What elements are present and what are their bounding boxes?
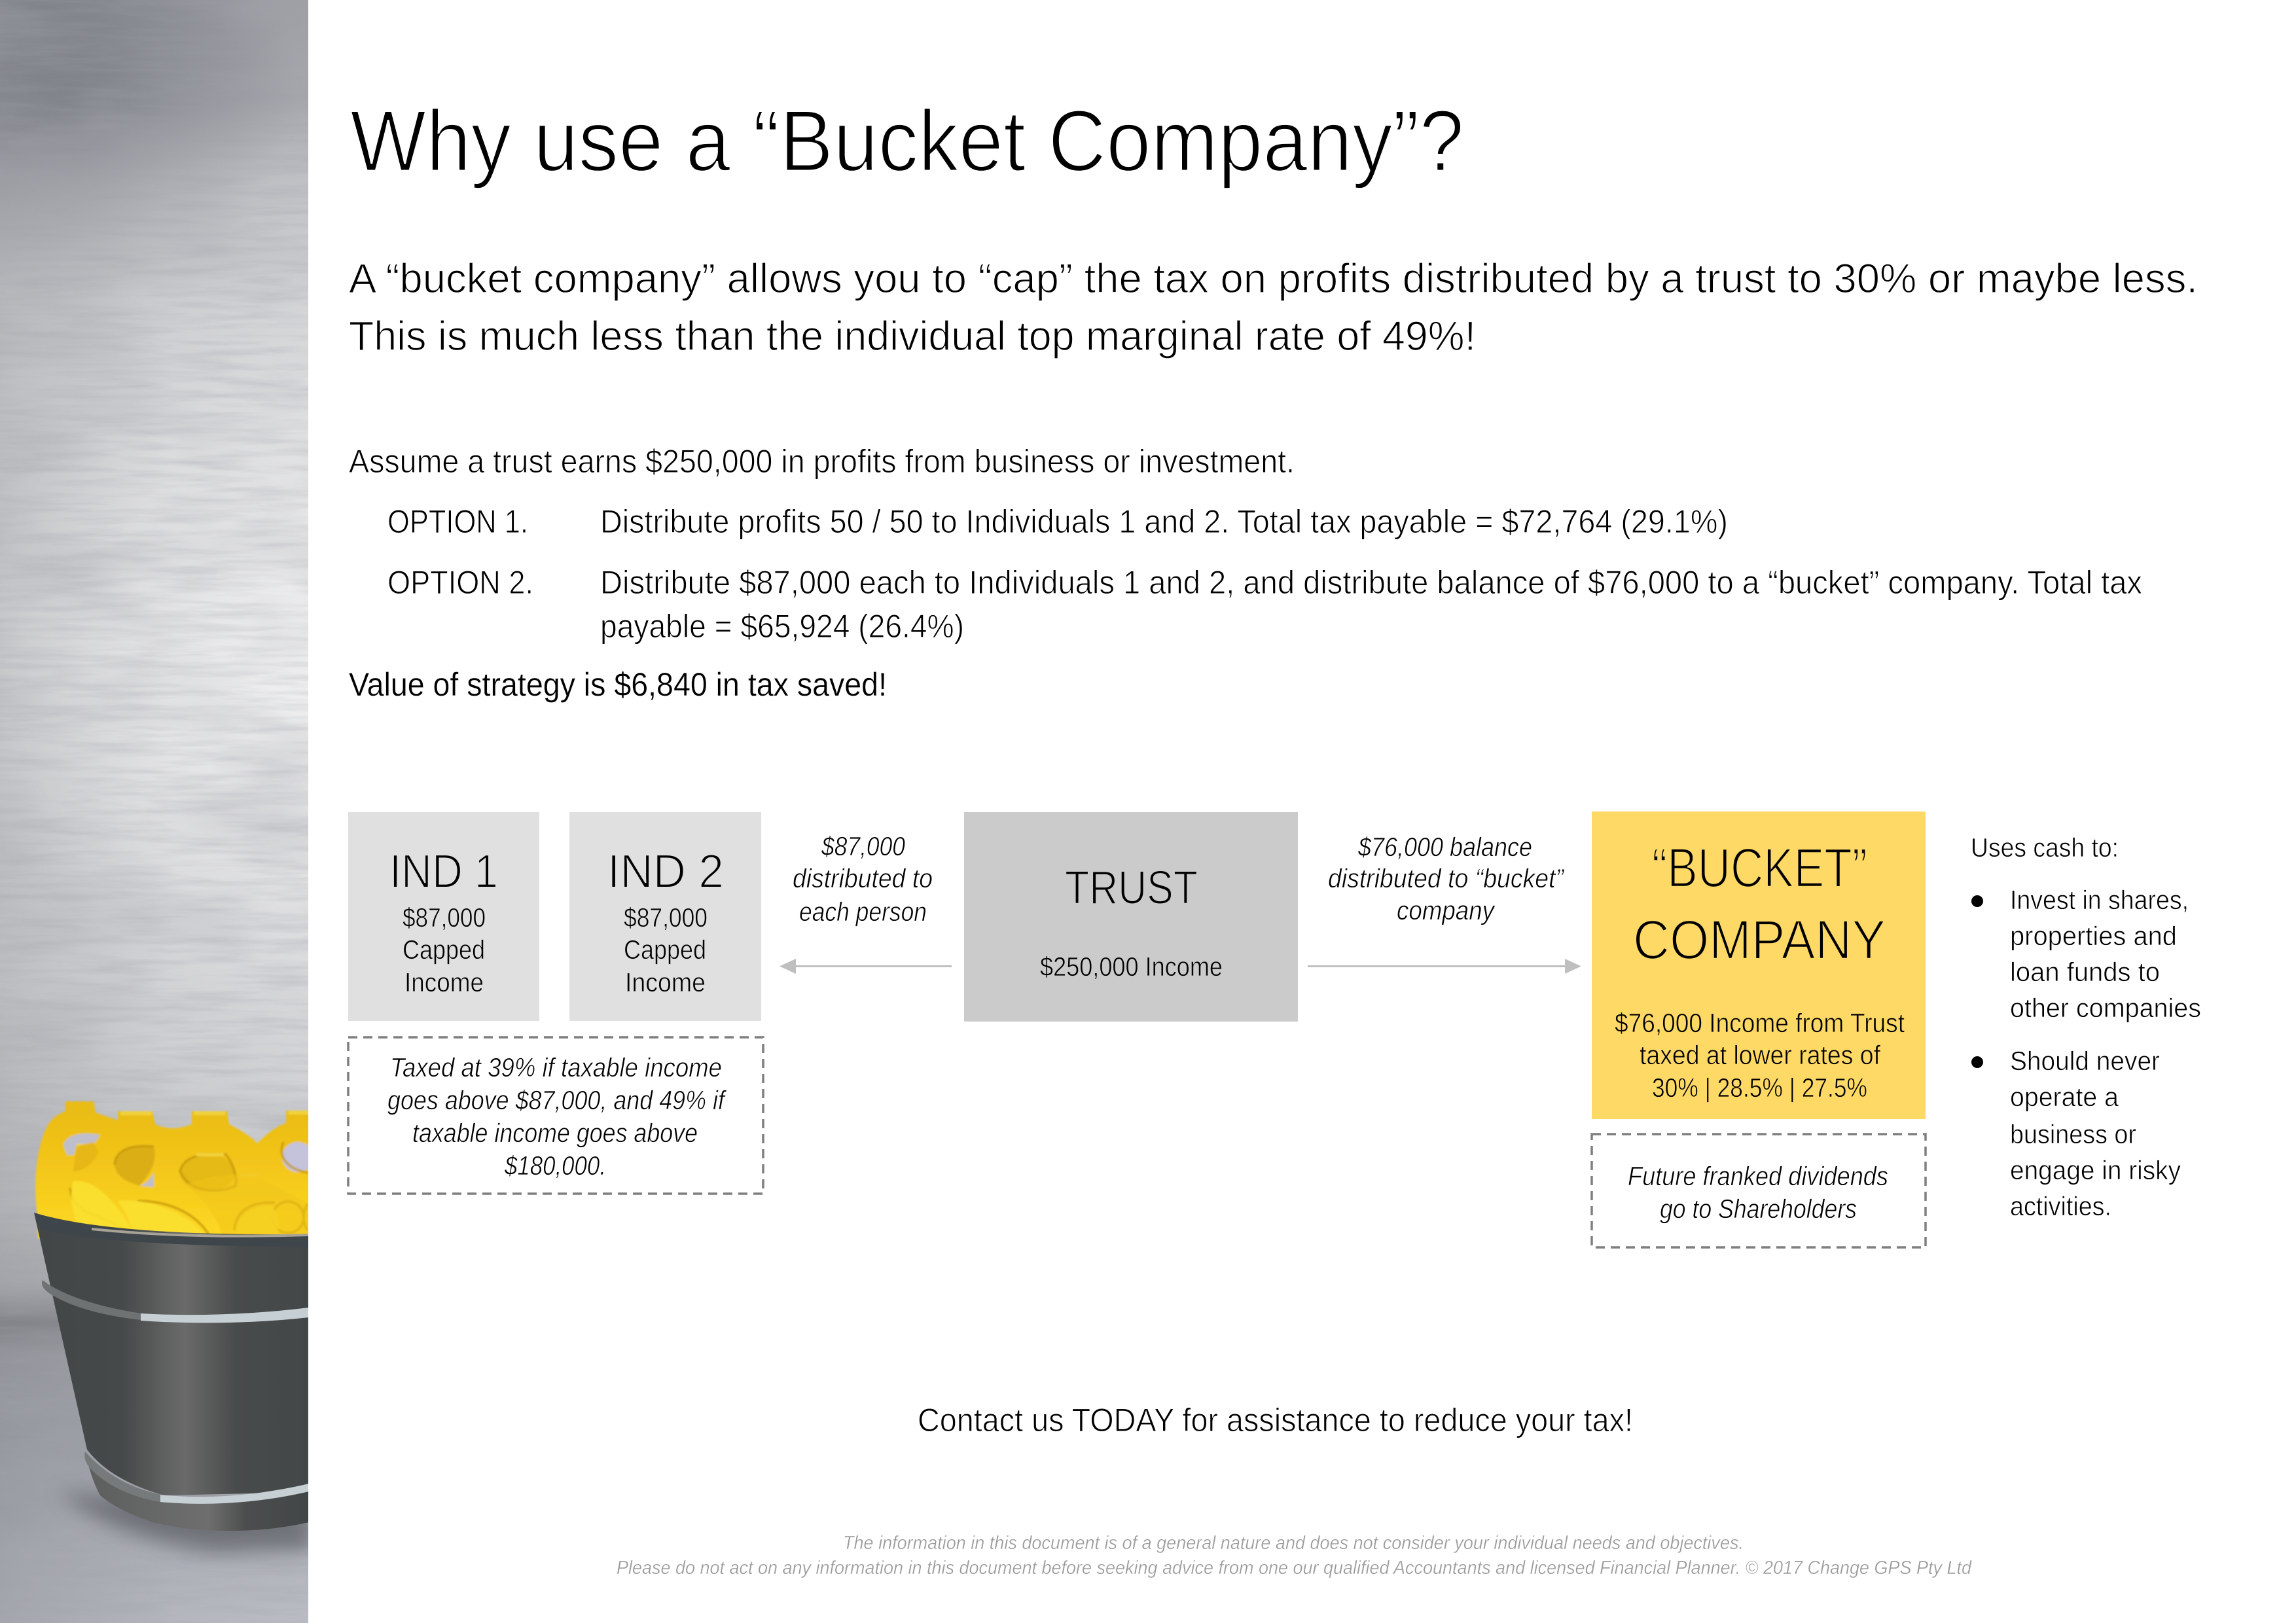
text block: uses of cash: activities. bbox=[2010, 1191, 2111, 1221]
text block: uses of cash bbox=[1971, 832, 2201, 1221]
text block: uses of cash: loan funds to bbox=[2010, 957, 2160, 987]
box: individual 2: Income bbox=[625, 967, 706, 997]
icon: gold dollar coins bbox=[35, 1101, 314, 1238]
footer disclaimer: Please do not act on any information in this document before seeking advice from one our qualified Accountants and licensed Financial Planner. © 2017 Change GPS Pty Ltd bbox=[617, 1558, 1972, 1578]
label: balance to bucket company bbox=[1328, 832, 1565, 925]
title: Why use a “Bucket Company”? bbox=[350, 93, 1464, 190]
box: individual 1 bbox=[348, 812, 539, 1021]
call to action: Contact us TODAY for assistance to reduce your tax! bbox=[918, 1402, 1633, 1438]
box: bucket company: COMPANY bbox=[1633, 909, 1886, 971]
label: balance to bucket company: company bbox=[1397, 895, 1496, 925]
assumption and options text bbox=[349, 443, 2142, 703]
footer disclaimer bbox=[617, 1533, 1972, 1578]
box: individual 2: $87,000 bbox=[624, 902, 708, 933]
image panel: concrete wall with bucket of gold coins bbox=[0, 0, 314, 1623]
text block: uses of cash: Should never bbox=[2010, 1046, 2160, 1076]
box: individual 1: $87,000 bbox=[403, 902, 486, 933]
icon: metal bucket bbox=[34, 1213, 309, 1531]
text block: uses of cash: properties and bbox=[2010, 921, 2177, 951]
callout: tax rates for individuals: goes above $87,000, and 49% if bbox=[387, 1085, 726, 1115]
intro text: This is much less than the individual top marginal rate of 49%! bbox=[349, 313, 1476, 359]
callout: tax rates for individuals bbox=[348, 1037, 763, 1194]
assumption and options text: Value of strategy is $6,840 in tax saved! bbox=[349, 666, 887, 703]
assumption and options text: Distribute $87,000 each to Individuals 1 and 2, and distribute balance of $76,000 to a “bucket” company. Total tax bbox=[600, 564, 2142, 601]
box: individual 2: Capped bbox=[624, 935, 706, 965]
assumption and options text: OPTION 1. bbox=[387, 503, 528, 540]
box: individual 1: Income bbox=[404, 967, 484, 997]
intro text: A “bucket company” allows you to “cap” the tax on profits distributed by a trust to 30% or maybe less. bbox=[349, 256, 2198, 302]
box: individual 2 bbox=[569, 812, 761, 1021]
box: bucket company: “BUCKET” bbox=[1652, 837, 1867, 899]
assumption and options text: Distribute profits 50 / 50 to Individuals 1 and 2. Total tax payable = $72,764 (29.1%) bbox=[600, 503, 1728, 540]
box: trust: $250,000 Income bbox=[1040, 952, 1223, 982]
label: balance to bucket company: $76,000 balance bbox=[1357, 832, 1532, 862]
box: trust: TRUST bbox=[1065, 862, 1198, 914]
arrow: trust to bucket company bbox=[1308, 959, 1581, 974]
text block: uses of cash: other companies bbox=[2010, 993, 2201, 1023]
callout: tax rates for individuals: $180,000. bbox=[504, 1150, 606, 1181]
callout: tax rates for individuals: taxable income goes above bbox=[412, 1118, 698, 1148]
label: distribution to individuals: distributed to bbox=[793, 863, 933, 893]
callout: tax rates for individuals: Taxed at 39% if taxable income bbox=[390, 1052, 722, 1082]
label: balance to bucket company: distributed to “bucket” bbox=[1328, 863, 1565, 893]
box: bucket company: $76,000 Income from Trust bbox=[1615, 1008, 1905, 1038]
assumption and options text: Assume a trust earns $250,000 in profits from business or investment. bbox=[349, 443, 1295, 480]
callout: franked dividends bbox=[1592, 1134, 1926, 1247]
label: distribution to individuals bbox=[793, 831, 933, 927]
box: bucket company: 30% | 28.5% | 27.5% bbox=[1652, 1073, 1867, 1103]
callout: franked dividends: go to Shareholders bbox=[1660, 1194, 1857, 1224]
footer disclaimer: The information in this document is of a general nature and does not consider your individual needs and objectives. bbox=[843, 1533, 1744, 1554]
assumption and options text: OPTION 2. bbox=[387, 564, 533, 601]
box: bucket company: taxed at lower rates of bbox=[1640, 1040, 1881, 1070]
label: distribution to individuals: each person bbox=[799, 897, 927, 927]
arrow: trust to individuals bbox=[780, 959, 952, 974]
text block: uses of cash: Uses cash to: bbox=[1971, 832, 2119, 863]
box: trust bbox=[964, 812, 1298, 1022]
assumption and options text: payable = $65,924 (26.4%) bbox=[600, 608, 964, 645]
text block: uses of cash: engage in risky bbox=[2010, 1155, 2181, 1185]
text block: uses of cash: Invest in shares, bbox=[2010, 885, 2189, 915]
callout: franked dividends: Future franked dividends bbox=[1628, 1161, 1888, 1191]
intro text bbox=[349, 256, 2198, 359]
label: distribution to individuals: $87,000 bbox=[821, 831, 905, 861]
box: individual 1: IND 1 bbox=[389, 846, 498, 898]
box: individual 2: IND 2 bbox=[607, 846, 724, 898]
text block: uses of cash: operate a bbox=[2010, 1082, 2119, 1112]
text block: uses of cash: business or bbox=[2010, 1119, 2136, 1149]
box: bucket company bbox=[1592, 812, 1926, 1119]
box: individual 1: Capped bbox=[403, 935, 485, 965]
